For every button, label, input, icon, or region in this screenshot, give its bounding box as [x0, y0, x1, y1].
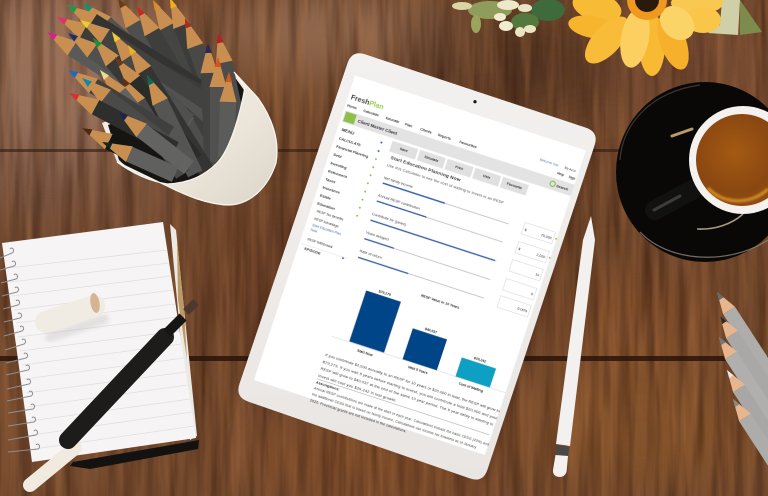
- explanation paragraph: RESP will grow to $40,037 at the end of the same 10 year period. The 5 year delay in starting to: [320, 366, 495, 427]
- client bar: [342, 110, 575, 196]
- sidebar menu: Education: [317, 201, 336, 211]
- slider: net family income: $: [524, 228, 527, 232]
- slider: net family income: Net family income: [383, 176, 413, 189]
- sidebar menu: RESP Withdrawal: [307, 237, 333, 249]
- notebook: [0, 222, 199, 469]
- navigation: Reports: [437, 133, 451, 141]
- spiral binding: [0, 248, 40, 452]
- toolbar buttons: Hide: [482, 174, 491, 180]
- account links: Help: [557, 171, 564, 177]
- calculator intro: Use this Calculator to see the cost of waiting to invest in an RESP: [386, 163, 504, 205]
- slider: years delayed: 5: [530, 292, 533, 296]
- sidebar menu: Estate: [319, 193, 332, 201]
- bar: wait 5 years: [400, 324, 449, 378]
- cup front wall: [117, 72, 277, 205]
- account links: [537, 158, 578, 181]
- coffee cup on saucer: [616, 82, 768, 262]
- foliage sprig: [452, 0, 565, 37]
- sidebar menu: MENU: [341, 127, 355, 136]
- leaf: [708, 0, 762, 35]
- explanation paragraph: If you contribute $2,000 annually to an RESP for 10 years or $20,000 in total, the RESP will grow to: [325, 352, 502, 414]
- sidebar menu: Now: [310, 228, 318, 234]
- sidebar menu: Financial Planning: [336, 145, 369, 159]
- slider: annual RESP contribution: $: [518, 247, 521, 251]
- bar: start now: $79,279: [378, 289, 391, 297]
- navigation: Calculate: [363, 109, 379, 118]
- tablet body: [238, 53, 596, 480]
- tablet: [238, 53, 596, 480]
- cup rim: [689, 106, 768, 214]
- sidebar menu: [302, 127, 375, 261]
- slider: contribute for years: Contribute for (years): [371, 212, 407, 227]
- slider: net family income: 75,000: [540, 233, 552, 240]
- sidebar menu: Start Education Plan: [312, 223, 342, 236]
- logo: FreshPlan: [350, 93, 385, 112]
- account links: Sign: [568, 175, 576, 181]
- marker cap: [46, 292, 104, 337]
- sidebar menu: Insurance: [322, 185, 340, 195]
- tea: [696, 114, 768, 206]
- toolbar buttons: Print: [455, 165, 464, 172]
- handle: [654, 129, 743, 229]
- sidebar menu: Debt: [333, 153, 343, 160]
- slider: contribute for years: [368, 212, 544, 281]
- navigation: Educate: [385, 116, 400, 124]
- slider: rate of return: Rate of return: [359, 249, 382, 260]
- bar: cost of waiting: $39,242: [473, 356, 487, 364]
- back cover: [70, 440, 199, 469]
- assumptions: Assumptions:: [315, 380, 340, 392]
- chart title: RESP Value In 10 Years: [420, 294, 460, 310]
- slider: years delayed: [362, 230, 538, 300]
- sidebar menu: RESP Tax Benefits: [316, 209, 344, 222]
- coloured pencils: [42, 0, 250, 182]
- bar chart: [330, 272, 527, 400]
- assumptions: the additional CESG that is based on family income. Calculations use income tax brackets as of January: [312, 392, 477, 449]
- pencil holder: [42, 0, 277, 205]
- client bar: Client Master Client: [357, 119, 398, 136]
- camera: [473, 100, 477, 103]
- navigation: Plan: [404, 122, 413, 129]
- flower: [452, 0, 762, 76]
- sidebar menu: CALCULATE: [338, 137, 362, 148]
- calculator title: Start Education Planning Now: [390, 155, 461, 184]
- sidebar menu: Taxes: [325, 177, 336, 184]
- sidebar menu: Retirement: [327, 169, 348, 179]
- screen: [253, 75, 587, 459]
- grey pencils: [711, 288, 768, 472]
- sidebar menu: EPISODE: [304, 247, 322, 256]
- bar: cost of waiting: [453, 353, 498, 395]
- toolbar buttons: [389, 141, 529, 196]
- explanation paragraph: invest will cost you $39,242 in lost growth.: [318, 373, 397, 403]
- bar: start now: Start Now: [357, 348, 374, 357]
- bar: cost of waiting: Cost of Waiting: [458, 381, 484, 393]
- slider: annual RESP contribution: [374, 193, 553, 264]
- sidebar markers: [301, 128, 386, 260]
- saucer: [616, 82, 768, 262]
- sidebar menu: RESP Advantage: [314, 217, 339, 229]
- toolbar buttons: Simulate: [424, 155, 439, 163]
- toolbar buttons: Favourite: [506, 182, 523, 191]
- bar: wait 5 years: $40,037: [424, 327, 438, 335]
- ruled lines: [8, 250, 194, 449]
- slider: net family income: [381, 176, 559, 245]
- page: [2, 222, 196, 462]
- slider: rate of return: [356, 249, 532, 317]
- navigation: Home: [347, 104, 357, 111]
- marker pen: [30, 302, 196, 485]
- explanation paragraph: $79,279. If you wait 5 years before starting to invest, you will contribute a total $20,000 and your: [322, 359, 499, 421]
- slider: annual RESP contribution: 2,000: [536, 253, 546, 259]
- account links: Welcome Sue: [539, 158, 559, 168]
- sidebar menu: Investing: [330, 161, 348, 170]
- cup interior: [108, 76, 244, 184]
- slider: contribute for years: 10: [535, 272, 540, 277]
- slider: rate of return: 6.00%: [517, 307, 529, 314]
- slider: annual RESP contribution: Annual RESP contribution: [378, 193, 421, 211]
- navigation: Clients: [420, 127, 432, 135]
- bar: start now: [347, 286, 403, 360]
- tablet shadow: [240, 67, 595, 474]
- toolbar buttons: Save: [399, 147, 408, 153]
- client bar: Search: [556, 184, 569, 192]
- assumptions: Annual RESP contributions are made at the start of each year. Calculations include the basic CESG (20%) and: [314, 386, 490, 447]
- account links: My Acco: [564, 166, 577, 173]
- navigation: [347, 104, 477, 149]
- cup back: [102, 72, 277, 205]
- petals: [566, 0, 723, 76]
- stylus: [553, 216, 595, 477]
- bar: wait 5 years: Wait 5 Years: [408, 365, 428, 375]
- slider: years delayed: Years delayed: [365, 230, 389, 242]
- navigation: Favourites: [459, 140, 477, 149]
- assumptions: 2020. Provincial grants are not included in the calculations.: [309, 398, 407, 434]
